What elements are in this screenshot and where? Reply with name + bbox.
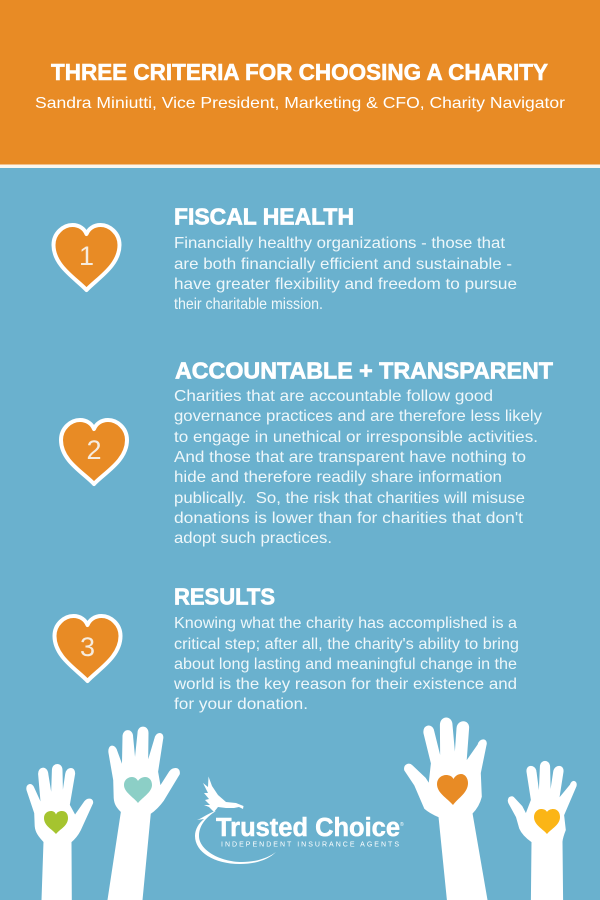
panel: criterion 3 results [54, 584, 519, 713]
logo: Trusted Choice [195, 776, 404, 864]
icon: heart number 1: 1 [79, 241, 94, 271]
text block: accountable body: And those that are transparent have nothing to [174, 449, 526, 466]
icon: hand with yellow heart [509, 762, 576, 900]
panel: criterion 2 accountable and transparent [61, 358, 554, 547]
text block: results body: for your donation. [174, 696, 308, 713]
icon: logo swoosh [195, 811, 276, 864]
text block: accountable body: adopt such practices. [174, 530, 332, 547]
text block: results body: about long lasting and meaningful change in the [174, 656, 517, 673]
heading: accountable + transparent: ACCOUNTABLE + TRANSPARENT [175, 358, 554, 384]
text block: accountable body: governance practices and are therefore less likely [174, 408, 542, 425]
icon: heart number 2: 2 [86, 435, 102, 465]
logo wordmark: Trusted Choice [216, 814, 400, 842]
text block: results body: Knowing what the charity has accomplished is a [174, 615, 517, 632]
icon: heart number 1 [54, 225, 120, 290]
text block: fiscal health body: have greater flexibility and freedom to pursue [174, 276, 517, 293]
text block: accountable body: to engage in unethical or irresponsible activities. [174, 429, 538, 446]
text block: results body [173, 615, 519, 713]
panel: orange header [0, 0, 600, 168]
text block: fiscal health body: their charitable mission. [174, 296, 323, 313]
text block: accountable body: Charities that are accountable follow good [174, 388, 493, 405]
subtitle: Sandra Miniutti, Vice President, Marketing & CFO, Charity Navigator [35, 95, 566, 112]
icon: hand with teal heart [108, 727, 179, 900]
icon: hand with orange heart [405, 718, 487, 900]
heading: fiscal health: FISCAL HEALTH [174, 204, 354, 230]
text block: results body: world is the key reason for their existence and [173, 676, 517, 693]
logo: Trusted Choice: ® [400, 821, 404, 828]
title: THREE CRITERIA FOR CHOOSING A CHARITY [51, 59, 548, 85]
text block: accountable body: donations is lower than for charities that don't [174, 510, 524, 527]
heading: results: RESULTS [174, 584, 275, 610]
icon: hand with green heart [27, 765, 92, 900]
text block: accountable body [174, 388, 542, 547]
text block: accountable body: publically. So, the risk that charities will misuse [174, 490, 525, 507]
icon: heart number 3: 3 [80, 632, 95, 662]
text block: results body: critical step; after all, the charity's ability to bring [174, 636, 519, 653]
logo tagline: INDEPENDENT INSURANCE AGENTS [221, 842, 399, 848]
panel: criterion 1 fiscal health [54, 204, 517, 313]
text block: fiscal health body: are both financially efficient and sustainable - [174, 256, 512, 273]
text block: fiscal health body: Financially healthy organizations - those that [174, 235, 506, 252]
icon: heart number 2 [61, 420, 127, 484]
text block: fiscal health body [174, 235, 517, 313]
icon: eagle [203, 776, 244, 812]
icon: heart number 3 [54, 616, 120, 681]
text block: accountable body: hide and therefore readily share information [174, 469, 502, 486]
